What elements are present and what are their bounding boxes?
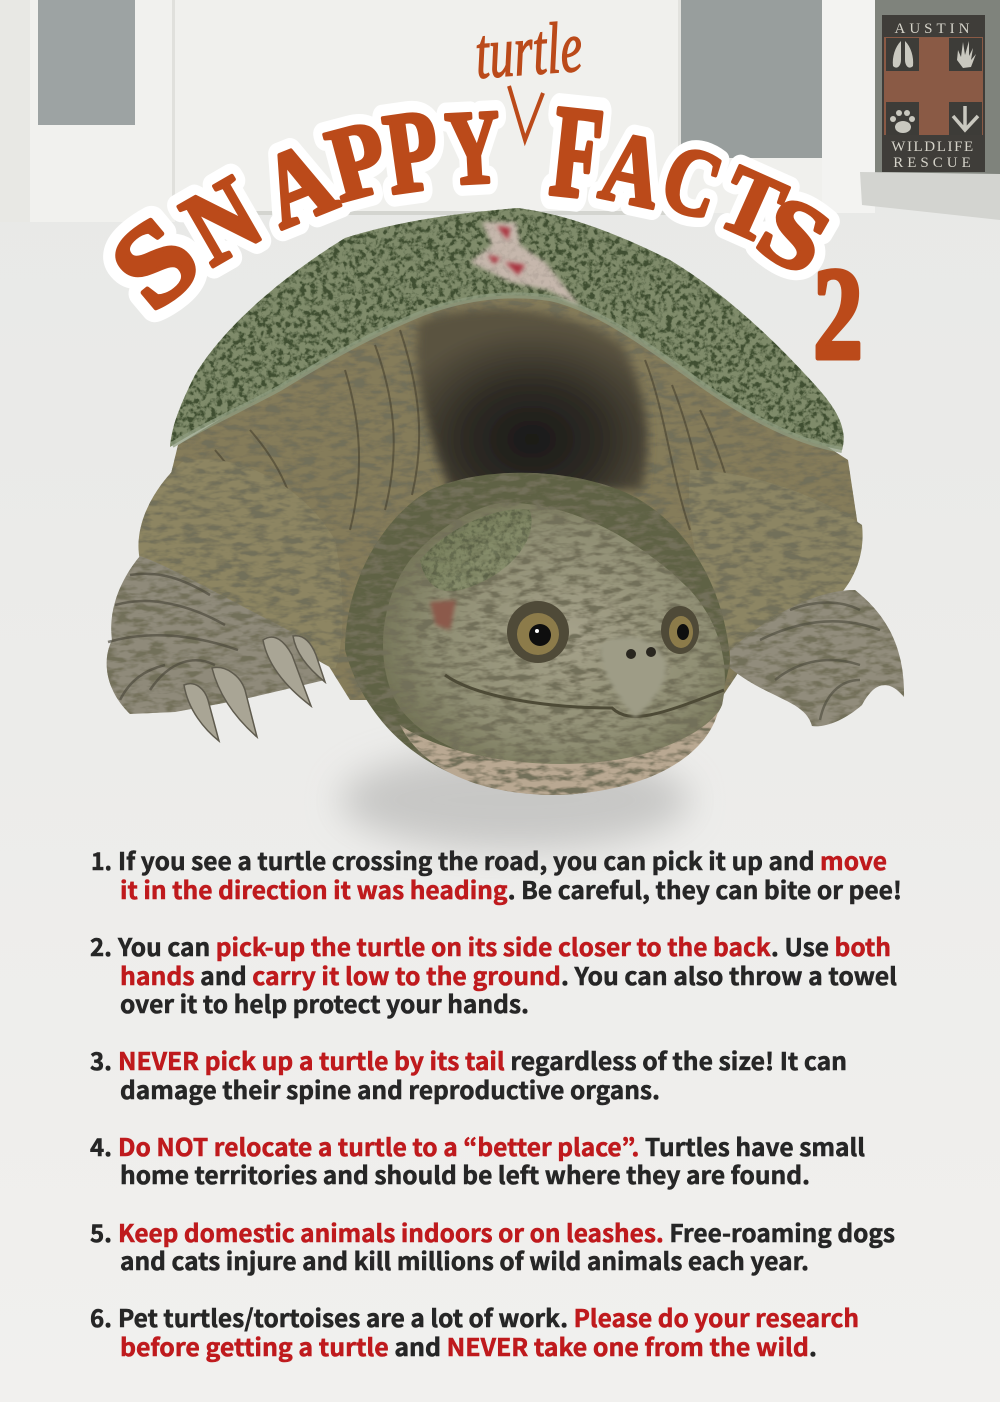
letter outline band: Y bbox=[443, 88, 503, 207]
snappy bbox=[87, 85, 503, 333]
left claws bbox=[184, 636, 325, 741]
fact 3: damage their spine and reproductive organs. bbox=[120, 1071, 660, 1106]
fact 2: 2. bbox=[90, 928, 112, 963]
letter outline band: S bbox=[741, 174, 847, 296]
body skin behind shell bbox=[150, 285, 860, 700]
letter outline band: F bbox=[545, 79, 609, 227]
letter outline band: C bbox=[650, 123, 734, 240]
facts: S bbox=[741, 174, 847, 296]
fact 5: Keep domestic animals indoors or on leashes. Free-roaming dogs bbox=[118, 1214, 895, 1249]
flank wrinkles bbox=[215, 330, 745, 585]
snappy: N bbox=[165, 155, 279, 288]
turtle shadow bbox=[340, 750, 690, 850]
letter outline band: N bbox=[165, 155, 279, 288]
mouth line bbox=[445, 675, 724, 716]
fact 2: You can pick-up the turtle on its side closer to the back . Use both bbox=[117, 928, 891, 963]
letter outline band: T bbox=[705, 146, 799, 264]
fact 4: Do NOT relocate a turtle to a “better place”. Turtles have small bbox=[118, 1128, 865, 1163]
fact 5 bbox=[90, 1214, 895, 1277]
letter outline band: A bbox=[246, 119, 350, 251]
fact 5: and cats injure and kill millions of wild animals each year. bbox=[120, 1242, 809, 1277]
logo: Austin Wildlife Rescue bbox=[882, 15, 985, 172]
head moss bbox=[420, 509, 532, 591]
icon: hoof print bbox=[893, 41, 913, 68]
number 2: 2 bbox=[813, 241, 863, 387]
turtle illustration bbox=[107, 208, 904, 795]
snappy: S bbox=[87, 191, 222, 333]
right foot bbox=[730, 590, 904, 726]
fact 4 bbox=[90, 1128, 865, 1191]
facts bbox=[545, 79, 847, 296]
turtle handwritten word: turtle bbox=[473, 8, 585, 94]
fact 6: Pet turtles/tortoises are a lot of work. Please do your research bbox=[118, 1299, 859, 1334]
letter outline band: S bbox=[87, 191, 222, 333]
facts list bbox=[90, 842, 902, 1363]
fact 3: NEVER pick up a turtle by its tail regardless of the size! It can bbox=[118, 1042, 847, 1077]
letter outline band: P bbox=[317, 98, 400, 224]
right eye bbox=[661, 606, 699, 654]
left foot bbox=[107, 556, 325, 714]
fact 1: it in the direction it was heading . Be careful, they can bite or pee! bbox=[120, 871, 902, 906]
fact 1: 1. bbox=[91, 842, 112, 877]
right foot scales bbox=[760, 602, 880, 720]
right leg bbox=[689, 470, 863, 650]
head wound bbox=[430, 600, 456, 630]
snappy: A bbox=[246, 119, 350, 251]
logo text: Wildlife: WILDLIFE bbox=[891, 139, 975, 155]
caret bbox=[509, 86, 543, 140]
title: Snappy turtle Facts 2 bbox=[87, 8, 863, 387]
left foot scales bbox=[108, 574, 238, 700]
shell injury bbox=[470, 222, 580, 306]
logo text: Rescue: RESCUE bbox=[893, 155, 975, 171]
snappy: P bbox=[377, 85, 446, 218]
letter outline band: A bbox=[592, 109, 672, 230]
letter outline band bbox=[87, 79, 847, 333]
logo text: Austin: AUSTIN bbox=[894, 21, 974, 37]
icon: bird track bbox=[953, 106, 978, 130]
fact 2: hands and carry it low to the ground . You can also throw a towel bbox=[120, 957, 897, 992]
head bbox=[383, 503, 725, 770]
icon: paw print bbox=[890, 110, 915, 133]
fact 6: 6. bbox=[90, 1299, 112, 1334]
left eye bbox=[507, 601, 569, 663]
facts: T bbox=[705, 146, 799, 264]
letter outline band: P bbox=[377, 85, 446, 218]
shell rim bbox=[172, 295, 842, 450]
shell opening bbox=[416, 309, 647, 490]
nostrils bbox=[626, 647, 656, 659]
neck collar bbox=[345, 473, 730, 795]
facts: C bbox=[650, 123, 734, 240]
fact 3: 3. bbox=[90, 1042, 112, 1077]
fact 6: before getting a turtle and NEVER take one from the wild . bbox=[120, 1328, 817, 1363]
fact 2: over it to help protect your hands. bbox=[120, 985, 529, 1020]
icon: hand print bbox=[957, 41, 976, 68]
fact 1 bbox=[91, 842, 902, 906]
lower jaw bbox=[400, 712, 718, 795]
snappy: Y bbox=[443, 88, 503, 207]
shell bbox=[170, 208, 844, 450]
fact 6 bbox=[90, 1299, 859, 1363]
fact 4: home territories and should be left where they are found. bbox=[120, 1156, 810, 1191]
facts: F bbox=[545, 79, 609, 227]
snappy: P bbox=[317, 98, 400, 224]
fact 1: If you see a turtle crossing the road, you can pick it up and move bbox=[118, 842, 887, 877]
fact 3 bbox=[90, 1042, 847, 1106]
fact 4: 4. bbox=[90, 1128, 112, 1163]
fact 5: 5. bbox=[90, 1214, 112, 1249]
facts: A bbox=[592, 109, 672, 230]
left leg bbox=[138, 459, 342, 670]
beak bbox=[600, 637, 666, 718]
fact 2 bbox=[90, 928, 897, 1020]
